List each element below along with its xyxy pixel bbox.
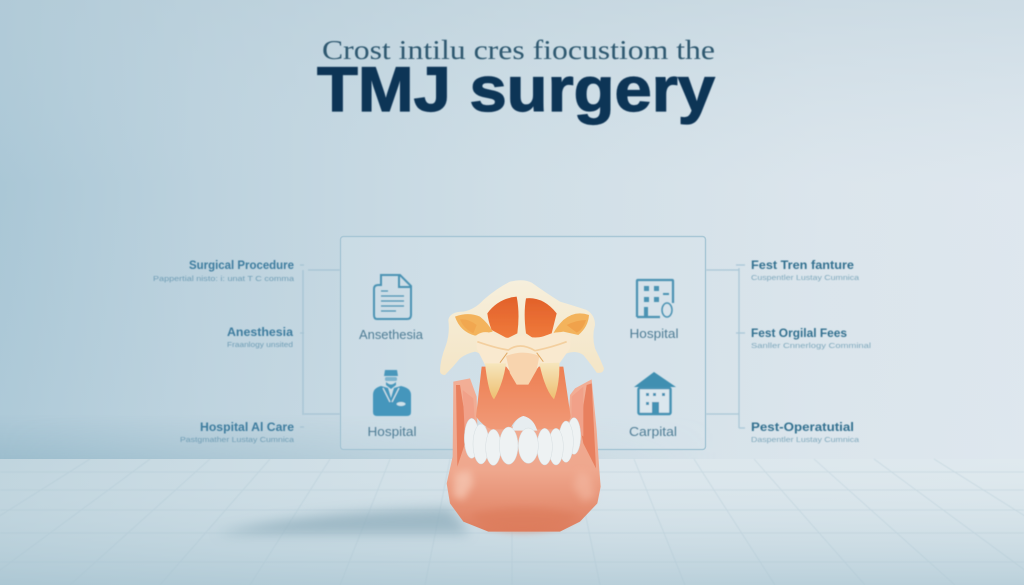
label: carpital: Carpital [629,425,677,439]
left label: hospital care: Pastgmather Lustay Cumnica [180,437,294,444]
nasal cavity [487,297,519,338]
canine left [485,363,506,399]
right label: post-operative: Pest-Operatutial [751,420,854,434]
left label: anesthesia: Anesthesia [227,325,293,339]
orbit sinus left [455,314,493,336]
right label: fest orgial fees [751,326,872,350]
tooth gap [512,416,537,431]
left label: surgical procedure [153,258,294,283]
label: hospital (right): Hospital [630,327,678,341]
inner rami shading [456,383,596,468]
right label: post-operative: Daspentler Lustay Cumnica [751,437,859,444]
title block [317,35,715,125]
left label: surgical procedure: Pappertial nisto: i: unat T C comma [153,276,294,283]
jaw shadow [215,508,470,534]
canine right [539,363,559,399]
icon: hospital building [637,280,673,317]
background wall [0,0,1024,460]
center panel [340,236,706,450]
orbit sinus right [553,313,589,335]
jaw model [440,280,604,532]
label: hospital (left): Hospital [368,425,416,439]
left label: hospital care [180,420,294,444]
center palate bone [506,353,539,385]
subtitle: Crost intilu cres fiocustiom the [322,35,715,65]
maxilla ridge [477,332,571,372]
right label: fest tren fanture [751,258,859,282]
connector lines: right [706,265,745,428]
left label: anesthesia: Fraanlogy unsited [227,342,293,349]
left label: anesthesia [227,325,293,349]
right label: post-operative [751,420,859,444]
gum highlights [453,470,595,532]
label: ansethesia: Ansethesia [359,328,423,342]
tiled floor [0,459,1024,585]
right label: fest orgial fees: Fest Orgilal Fees [751,326,847,340]
right label: fest orgial fees: Sanller Cnnerlogy Comminal [751,343,872,350]
lower jaw body [447,378,601,532]
left label: hospital care: Hospital Al Care [200,420,294,434]
main heading: TMJ surgery [317,55,715,125]
icon: document [374,275,411,319]
upper skull [440,280,604,375]
palate [476,367,571,429]
icon: house [634,372,676,414]
left label: surgical procedure: Surgical Procedure [189,258,294,272]
icon: doctor [373,370,411,416]
right label: fest tren fanture: Fest Tren fanture [751,258,854,272]
lower teeth [464,418,581,465]
right label: fest tren fanture: Cuspentler Lustay Cumnica [751,275,859,282]
connector lines: left [300,265,340,427]
